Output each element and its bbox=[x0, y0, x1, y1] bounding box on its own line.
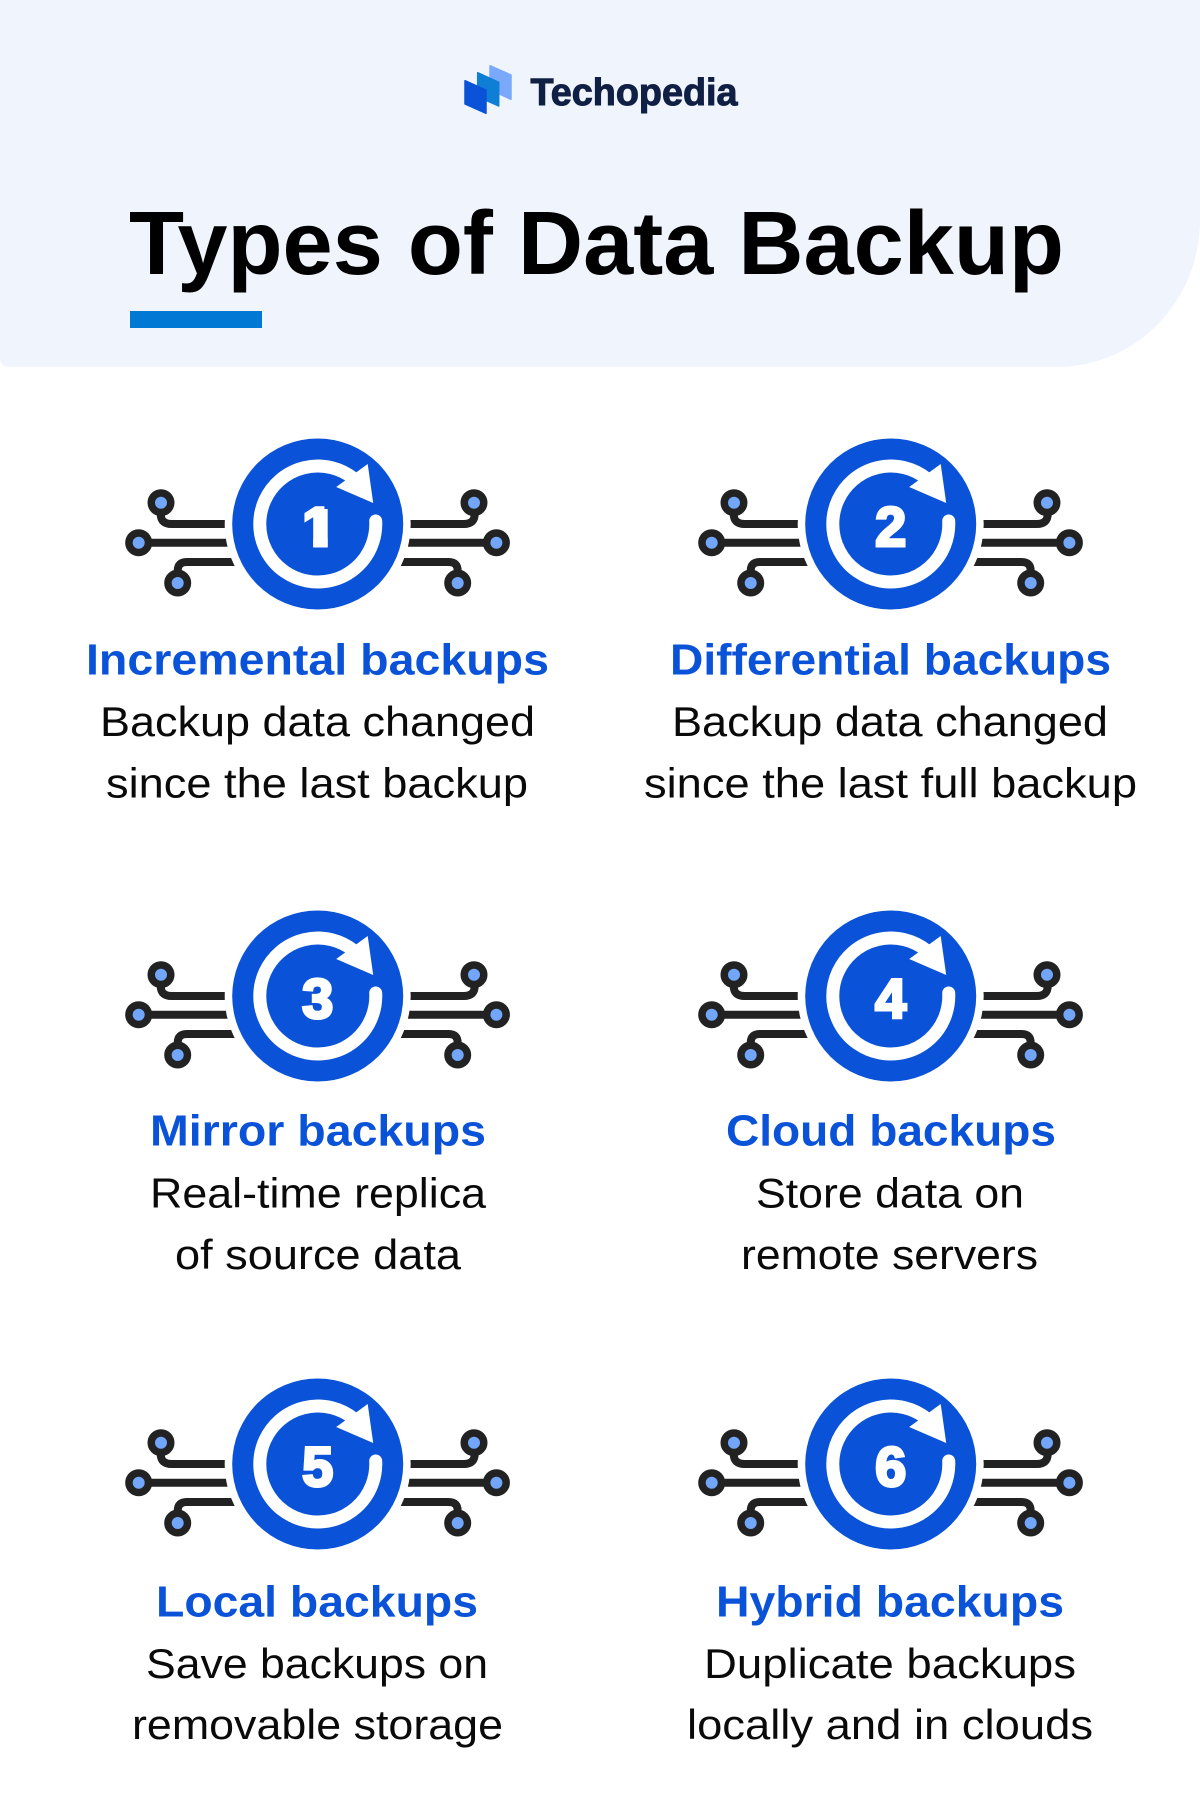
icon: backup cycle 2: 2 bbox=[875, 495, 906, 558]
item 3: mirror backups bbox=[129, 903, 506, 1278]
icon: backup cycle 5 bbox=[129, 1371, 506, 1557]
description: local backups bbox=[132, 1640, 503, 1748]
header panel bbox=[0, 0, 1200, 367]
icon: backup cycle 1: 1 bbox=[302, 495, 333, 558]
description: local backups: removable storage bbox=[132, 1701, 503, 1748]
item 2: differential backups bbox=[644, 431, 1137, 806]
description: mirror backups: of source data bbox=[175, 1231, 462, 1278]
item 1: incremental backups bbox=[86, 431, 549, 806]
item 4: cloud backups bbox=[702, 903, 1079, 1278]
icon: backup cycle 6: 6 bbox=[875, 1435, 906, 1498]
icon: backup cycle 2 bbox=[702, 431, 1079, 617]
icon: backup cycle 3 bbox=[129, 903, 506, 1089]
item 6: hybrid backups bbox=[687, 1371, 1093, 1748]
title accent bar bbox=[130, 311, 262, 328]
description: hybrid backups: Duplicate backups bbox=[704, 1640, 1076, 1687]
description: cloud backups: remote servers bbox=[741, 1231, 1038, 1278]
heading: hybrid backups: Hybrid backups bbox=[716, 1578, 1064, 1626]
description: differential backups: Backup data changed bbox=[672, 698, 1108, 745]
heading: mirror backups: Mirror backups bbox=[150, 1106, 486, 1156]
icon: backup cycle 1 bbox=[129, 431, 506, 617]
description: local backups: Save backups on bbox=[146, 1640, 488, 1687]
logo wordmark: Techopedia bbox=[530, 72, 738, 114]
description: incremental backups: since the last backup bbox=[106, 760, 528, 806]
description: mirror backups: Real-time replica bbox=[150, 1170, 487, 1216]
description: hybrid backups bbox=[687, 1640, 1093, 1748]
description: cloud backups bbox=[741, 1170, 1038, 1278]
description: incremental backups bbox=[100, 698, 535, 806]
description: incremental backups: Backup data changed bbox=[100, 698, 535, 745]
heading: cloud backups: Cloud backups bbox=[726, 1106, 1056, 1156]
icon: backup cycle 6 bbox=[702, 1371, 1079, 1557]
description: differential backups: since the last full backup bbox=[644, 760, 1137, 806]
description: cloud backups: Store data on bbox=[756, 1170, 1024, 1216]
heading: differential backups: Differential backups bbox=[670, 636, 1111, 684]
heading: local backups: Local backups bbox=[156, 1578, 478, 1626]
title: Types of Data Backup bbox=[129, 194, 1064, 294]
icon: backup cycle 4 bbox=[702, 903, 1079, 1089]
icon: logo stacked sheets bbox=[465, 66, 511, 113]
icon: backup cycle 4: 4 bbox=[875, 967, 906, 1030]
item 5: local backups bbox=[129, 1371, 506, 1748]
logo: Techopedia bbox=[465, 66, 738, 114]
description: hybrid backups: locally and in clouds bbox=[687, 1701, 1093, 1748]
icon: backup cycle 5: 5 bbox=[302, 1435, 333, 1498]
description: differential backups bbox=[644, 698, 1137, 806]
heading: incremental backups: Incremental backups bbox=[86, 636, 549, 684]
icon: backup cycle 3: 3 bbox=[302, 967, 333, 1030]
description: mirror backups bbox=[150, 1170, 487, 1278]
